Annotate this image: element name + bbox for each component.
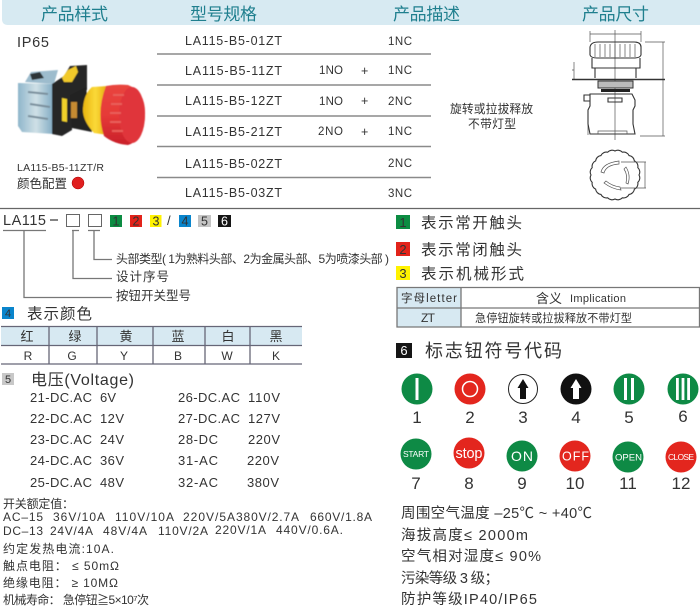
row: 12ZT: +: [361, 94, 368, 108]
section 6: symbol code heading: 6: [400, 343, 408, 358]
code color keys: /: [167, 213, 171, 228]
heading: product style: 产品样式: [41, 5, 108, 24]
heading: model spec: 型号规格: [190, 5, 257, 24]
header band: [2, 0, 700, 25]
row: 11ZT: LA115-B5-11ZT: [185, 64, 282, 78]
voltage code list: 48V: [100, 475, 124, 490]
code color keys: 4: [182, 214, 189, 228]
symbol 1: I: [402, 374, 432, 427]
table: letter implication: 急停钮旋转或拉拔释放不带灯型: [475, 311, 632, 325]
table: letter implication: [397, 287, 700, 327]
symbol 8: stop: 8: [464, 474, 474, 493]
voltage code list: 32-AC: [178, 475, 218, 490]
symbol 9: ON: 9: [517, 474, 527, 493]
symbol 6: III: 6: [678, 407, 688, 426]
row: 02ZT: 2NC: [388, 158, 412, 170]
voltage code list: 6V: [100, 390, 116, 405]
row: 12ZT: LA115-B5-12ZT: [185, 94, 282, 108]
row: 01ZT: LA115-B5-01ZT: [185, 34, 282, 48]
symbol 8: stop: [454, 438, 484, 493]
table: letter implication: 含义: [536, 291, 562, 306]
row: 21ZT: 1NC: [388, 126, 412, 138]
heading: product description: 产品描述: [393, 5, 460, 24]
switch ratings text block: 约定发热电流:10A.: [3, 541, 114, 556]
section 4: color heading: 表示颜色: [27, 305, 92, 323]
note: head type: 头部类型( 1为熟料头部、2为金属头部、5为喷漆头部 ): [116, 251, 389, 266]
table: color codes: 黄: [119, 329, 133, 344]
symbol 3: up arrow on white: 3: [518, 408, 528, 427]
row: 11ZT: +: [361, 64, 368, 78]
product description text: 不带灯型: [468, 117, 516, 131]
environmental specs text block: 空气相对湿度≤ 90%: [401, 548, 541, 565]
row: 21ZT: LA115-B5-21ZT: [185, 125, 282, 139]
row: 12ZT: 1NO: [319, 96, 343, 108]
row: 12ZT: 2NC: [388, 96, 412, 108]
dimension drawing: top view: [590, 150, 646, 200]
symbol 12: CLOSE: [666, 442, 696, 493]
DC-13 ratings line: 440V/0.6A.: [276, 523, 343, 537]
table: color codes: W: [221, 349, 233, 363]
table: letter implication: Implication: [570, 293, 626, 305]
symbol 10: OFF: [560, 440, 590, 493]
voltage code list: [30, 390, 280, 490]
switch ratings text block: 开关额定值：: [3, 496, 74, 511]
row: 11ZT: [185, 64, 412, 78]
voltage code list: 26-DC.AC: [178, 390, 240, 405]
legend 1: normally open contact: 表示常开触头: [421, 214, 522, 232]
product description text: [450, 102, 533, 131]
section 5: voltage heading: 电压(Voltage): [31, 371, 134, 389]
row: 01ZT: 1NC: [388, 36, 412, 48]
voltage code list: 27-DC.AC: [178, 411, 240, 426]
voltage code list: 24-DC.AC: [30, 453, 92, 468]
symbol 8: stop: stop: [456, 446, 482, 462]
switch ratings text block: 触点电阻： ≤ 50mΩ: [3, 559, 119, 573]
ordering code diagram: [3, 213, 389, 303]
symbol 9: ON: ON: [511, 448, 533, 464]
symbol 11: OPEN: [612, 442, 644, 493]
table: letter implication: 字母letter: [401, 291, 457, 305]
voltage code list: 21-DC.AC: [30, 390, 92, 405]
code color keys: 2: [133, 214, 140, 228]
AC-15 ratings line: AC–15: [3, 510, 43, 524]
row: 03ZT: LA115-B5-03ZT: [185, 186, 282, 200]
table: color codes: 红: [20, 329, 34, 344]
symbol 2: O: [454, 374, 486, 427]
heading: product dimensions: 产品尺寸: [582, 5, 649, 24]
voltage code list: 25-DC.AC: [30, 475, 92, 490]
product description text: 旋转或拉拔释放: [450, 102, 533, 116]
row: 02ZT: LA115-B5-02ZT: [185, 157, 282, 171]
symbol 1: I: 1: [412, 408, 422, 427]
voltage code list: 28-DC: [178, 432, 218, 447]
voltage code list: 23-DC.AC: [30, 432, 92, 447]
voltage code list: 220V: [247, 453, 279, 468]
table: color codes: B: [174, 349, 182, 363]
symbol 11: OPEN: OPEN: [615, 452, 642, 464]
voltage code list: 31-AC: [178, 453, 218, 468]
environmental specs text block: 周围空气温度 –25℃ ~ +40℃: [401, 505, 592, 522]
ordering code diagram: LA115: [3, 213, 46, 229]
voltage code list: 12V: [100, 411, 124, 426]
row: 02ZT: [185, 157, 412, 171]
row: 21ZT: +: [361, 125, 368, 139]
environmental specs text block: [401, 505, 592, 606]
code color keys: 6: [221, 214, 228, 228]
symbol 11: OPEN: 11: [619, 474, 637, 493]
AC-15 ratings line: 220V/5A: [183, 510, 235, 524]
section 4: color heading: 4: [5, 308, 11, 320]
legend 3: mechanical form: 3: [399, 266, 407, 281]
voltage code list: 36V: [100, 453, 124, 468]
section divider: [0, 208, 700, 210]
table: color codes: 白: [221, 329, 235, 344]
symbol 7: START: 7: [411, 474, 421, 493]
AC-15 ratings line: [3, 510, 372, 524]
DC-13 ratings line: DC–13: [3, 524, 43, 538]
table: color codes: Y: [120, 349, 128, 363]
symbol 7: START: START: [403, 449, 429, 459]
row: 03ZT: [185, 186, 412, 200]
switch ratings text block: [3, 496, 372, 606]
row: 21ZT: [185, 125, 412, 139]
DC-13 ratings line: 110V/2A: [158, 524, 208, 538]
note: button switch model: 按钮开关型号: [116, 288, 191, 303]
table: color codes: G: [67, 349, 77, 363]
color configuration label: [17, 176, 84, 191]
DC-13 ratings line: 24V/4A: [50, 524, 93, 538]
symbol 12: CLOSE: 12: [672, 474, 690, 493]
voltage code list: 24V: [100, 432, 124, 447]
voltage code list: 110V: [248, 390, 280, 405]
symbol 6: III: [668, 374, 698, 426]
photo caption: model: LA115-B5-11ZT/R: [17, 162, 104, 174]
legend 2: normally closed contact: 2: [399, 242, 407, 257]
code color keys: 3: [153, 214, 160, 228]
DC-13 ratings line: [3, 523, 343, 538]
symbol 5: II: 5: [624, 408, 634, 427]
symbol 9: ON: [506, 440, 538, 493]
note: design sequence: 设计序号: [116, 269, 169, 284]
row: 12ZT: [185, 94, 412, 108]
legend 1: normally open contact: 1: [399, 215, 407, 230]
table: color codes: [1, 326, 302, 364]
legend 2: normally closed contact: 表示常闭触头: [421, 241, 522, 259]
product photo: emergency stop button: [18, 65, 145, 145]
row: 01ZT: [185, 34, 412, 48]
symbol 5: II: [614, 374, 644, 427]
voltage code list: 380V: [247, 475, 279, 490]
voltage code list: 127V: [248, 411, 280, 426]
symbol 4: up arrow on black: [560, 374, 592, 427]
table: color codes: R: [24, 349, 33, 363]
color configuration label: 颜色配置: [17, 176, 67, 191]
icon: red color dot: [72, 177, 84, 189]
symbol 2: O: 2: [465, 408, 475, 427]
AC-15 ratings line: 380V/2.7A: [236, 510, 299, 524]
legend 3: mechanical form: 表示机械形式: [421, 265, 524, 283]
code placeholder boxes: [66, 214, 102, 226]
AC-15 ratings line: 36V/10A: [53, 510, 105, 524]
section 5: voltage heading: 5: [5, 374, 11, 386]
AC-15 ratings line: 660V/1.8A: [310, 510, 372, 524]
connector lines: [3, 230, 112, 298]
voltage code list: 220V: [248, 432, 280, 447]
table: letter implication: ZT: [421, 311, 436, 325]
protection rating label: IP65: [17, 35, 49, 51]
code color keys: [110, 213, 231, 228]
symbol 10: OFF: 10: [566, 474, 584, 493]
voltage code list: 22-DC.AC: [30, 411, 92, 426]
code color keys: 5: [201, 214, 208, 228]
table: color codes: 黑: [269, 329, 283, 344]
code color keys: 1: [113, 214, 120, 228]
table: color codes: K: [272, 349, 280, 363]
environmental specs text block: 海拔高度≤ 2000m: [401, 527, 528, 544]
symbol 12: CLOSE: CLOSE: [668, 452, 694, 462]
symbol 3: up arrow on white: [508, 374, 538, 427]
symbol 4: up arrow on black: 4: [571, 408, 581, 427]
symbol 7: START: [400, 438, 432, 493]
section 4: color heading: [2, 305, 92, 323]
row: 11ZT: 1NC: [388, 65, 412, 77]
DC-13 ratings line: 48V/4A: [103, 524, 147, 538]
row: 03ZT: 3NC: [388, 188, 412, 200]
table: color codes: 蓝: [171, 329, 185, 344]
AC-15 ratings line: 110V/10A: [115, 510, 174, 524]
table: color codes: 绿: [68, 329, 82, 344]
section 6: symbol code heading: 标志钮符号代码: [425, 341, 562, 361]
switch ratings text block: 绝缘电阻： ≥ 10MΩ: [3, 575, 118, 590]
DC-13 ratings line: 220V/1A: [215, 523, 266, 537]
environmental specs text block: 污染等级 3 级；: [401, 569, 499, 587]
dimension drawing: side view: [572, 30, 665, 140]
table: model rows: [157, 34, 431, 200]
row: 21ZT: 2NO: [318, 126, 343, 138]
symbol 10: OFF: OFF: [562, 450, 589, 464]
row: 11ZT: 1NO: [319, 65, 343, 77]
